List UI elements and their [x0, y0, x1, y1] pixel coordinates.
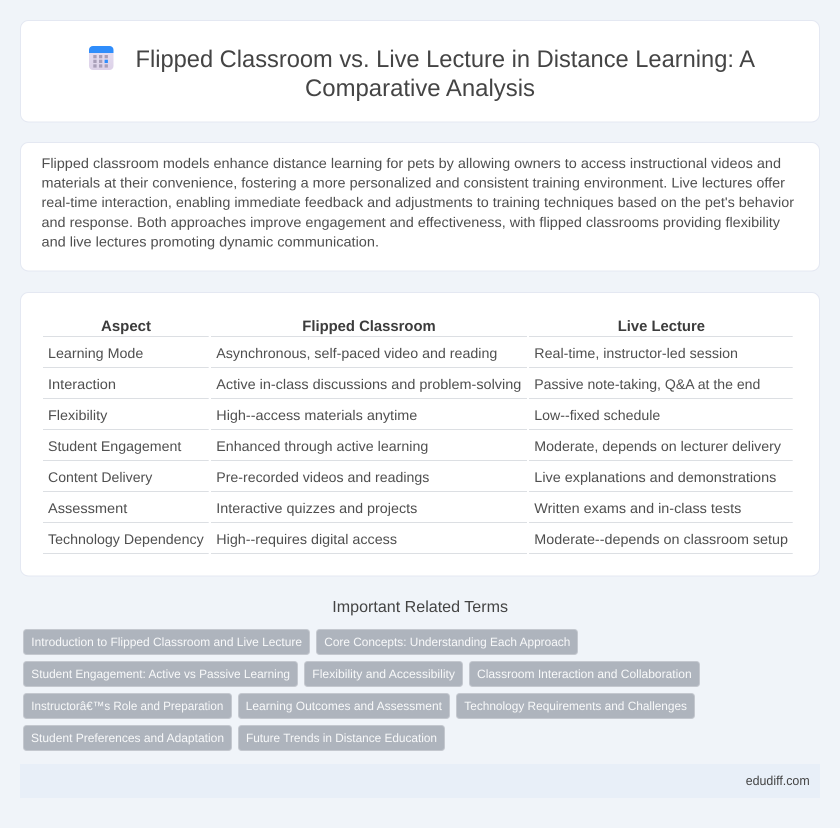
tag: student preferences	[24, 726, 232, 750]
footer: edudiff.com	[746, 773, 810, 788]
heading: important related terms: Important Related Terms	[332, 599, 508, 616]
tag: future trends: Future Trends in Distance Education	[246, 731, 437, 745]
tag: flexibility: Flexibility and Accessibility	[312, 667, 455, 681]
table row: content delivery	[43, 469, 793, 492]
table row: interaction: Active in-class discussions and problem-solving	[216, 376, 521, 392]
tag: learning outcomes	[238, 694, 450, 718]
tag: introduction	[24, 630, 310, 654]
table row: content delivery: Content Delivery	[48, 469, 152, 485]
table row: assessment: Written exams and in-class tests	[534, 500, 741, 516]
tag: learning outcomes: Learning Outcomes and Assessment	[246, 699, 443, 713]
table header row: Live Lecture	[618, 318, 705, 335]
table row: flexibility	[43, 407, 793, 430]
table row: interaction: Interaction	[48, 376, 116, 392]
footer	[20, 764, 820, 798]
text block: summary	[42, 155, 794, 249]
table row: assessment: Interactive quizzes and projects	[216, 500, 417, 516]
tag: core concepts	[316, 630, 578, 654]
title	[136, 46, 755, 102]
tag: technology requirements: Technology Requirements and Challenges	[464, 699, 687, 713]
table row: student engagement	[43, 438, 793, 460]
table row: assessment	[43, 500, 793, 522]
table row: flexibility: Low--fixed schedule	[534, 407, 661, 423]
table row: technology dependency	[43, 531, 793, 554]
table header row: Flipped Classroom	[302, 318, 436, 335]
title: Comparative Analysis	[305, 75, 535, 102]
icon: calendar	[89, 46, 114, 70]
tag: student preferences: Student Preferences and Adaptation	[31, 731, 224, 745]
tag: student engagement	[24, 662, 298, 686]
panel: summary paragraph	[20, 142, 820, 271]
tag: introduction: Introduction to Flipped Classroom and Live Lecture	[31, 635, 302, 649]
text block: summary: and response. Both approaches improve engagement and effectiveness, with flipped classrooms providing flexibility	[42, 214, 780, 230]
text block: summary: Flipped classroom models enhance distance learning for pets by allowing owners to access instructional videos and	[42, 155, 781, 171]
text block: summary: and live lectures promoting dynamic communication.	[42, 233, 379, 249]
table row: student engagement: Moderate, depends on lecturer delivery	[534, 438, 781, 454]
table row: technology dependency: High--requires digital access	[216, 531, 397, 547]
title: Flipped Classroom vs. Live Lecture in Distance Learning: A	[136, 46, 755, 73]
table row: learning mode: Learning Mode	[48, 345, 144, 361]
table row: learning mode: Asynchronous, self-paced video and reading	[216, 345, 497, 361]
table row: content delivery: Pre-recorded videos and readings	[216, 469, 429, 485]
table row: flexibility: Flexibility	[48, 407, 107, 423]
table header row	[43, 318, 793, 336]
tag: future trends	[238, 726, 444, 750]
text block: summary: real-time interaction, enabling immediate feedback and adjustments to training techniques based on the pet's behavior	[42, 194, 794, 210]
table header row: Aspect	[101, 318, 151, 335]
table row: content delivery: Live explanations and demonstrations	[534, 469, 776, 485]
table row: learning mode	[43, 345, 793, 368]
tag: classroom interaction: Classroom Interaction and Collaboration	[477, 667, 692, 681]
tag: technology requirements	[456, 694, 694, 718]
tag: instructor role	[24, 694, 232, 718]
table row: flexibility: High--access materials anytime	[216, 407, 418, 423]
table row: interaction	[43, 376, 793, 398]
table row: technology dependency: Technology Dependency	[48, 531, 204, 547]
table row: technology dependency: Moderate--depends on classroom setup	[534, 531, 788, 547]
tag: core concepts: Core Concepts: Understanding Each Approach	[324, 635, 570, 649]
text block: summary: materials at their convenience, fostering a more personalized and consistent training environment. Live lectures offer	[42, 175, 785, 191]
table row: learning mode: Real-time, instructor-led session	[534, 345, 738, 361]
panel: comparison table	[20, 292, 820, 576]
tag list: related terms	[24, 630, 700, 750]
table row: interaction: Passive note-taking, Q&A at the end	[534, 376, 760, 392]
tag: flexibility	[304, 662, 462, 686]
tag: student engagement: Student Engagement: Active vs Passive Learning	[31, 667, 290, 681]
table row: student engagement: Student Engagement	[48, 438, 181, 454]
panel: header	[20, 20, 820, 122]
tag: instructor role: Instructorâ€™s Role and Preparation	[31, 699, 223, 713]
tag: classroom interaction	[470, 662, 700, 686]
table row: student engagement: Enhanced through active learning	[216, 438, 428, 454]
table row: assessment: Assessment	[48, 500, 127, 516]
